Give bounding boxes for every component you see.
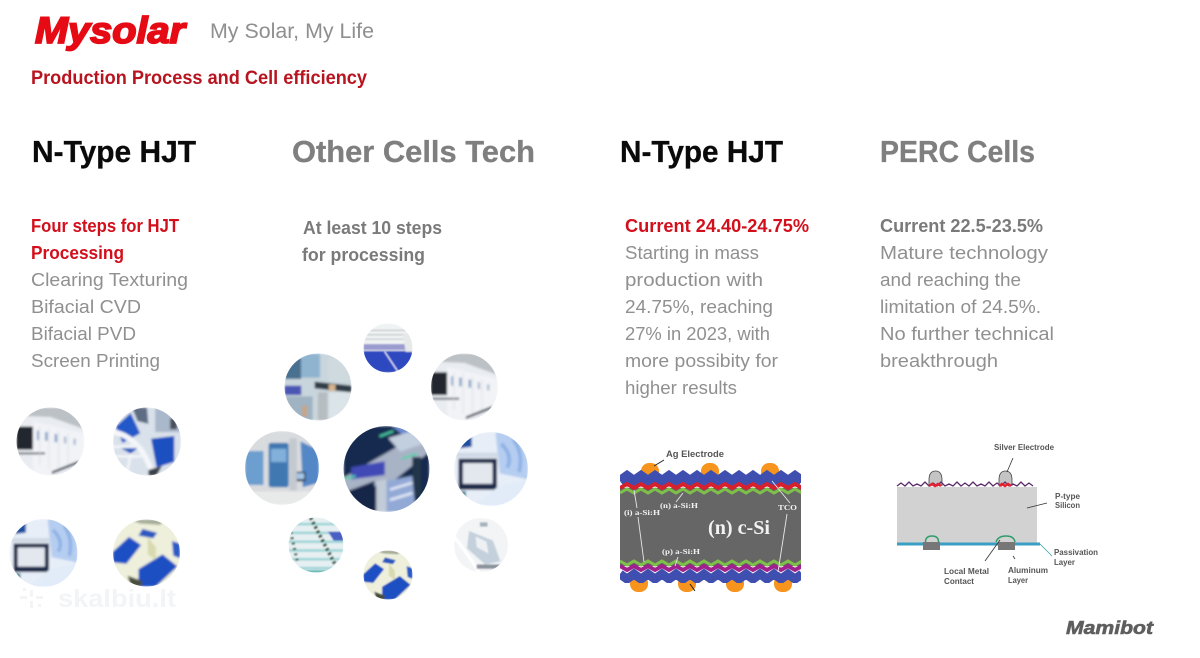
text block: HJT efficiency: production with xyxy=(625,270,763,290)
column heading: PERC Cells: PERC Cells xyxy=(880,134,1035,169)
label: Aluminum Layer xyxy=(1008,566,1048,585)
photo cluster: ten-step process xyxy=(245,324,528,600)
text block: HJT process steps: Screen Printing xyxy=(31,351,160,371)
text block: HJT efficiency xyxy=(625,216,809,398)
label: i a-Si:H: (i) a-Si:H xyxy=(624,509,661,517)
label: Ag Electrode: Ag Electrode xyxy=(666,449,724,459)
watermark: skalbiu.lt xyxy=(58,585,177,613)
column heading: N-Type HJT efficiency: N-Type HJT xyxy=(620,134,783,169)
text block: other cells steps: for processing xyxy=(302,245,425,265)
text block: HJT process steps: Bifacial CVD xyxy=(31,297,141,317)
photo: left xyxy=(245,431,319,505)
photo: centre xyxy=(344,426,430,512)
diagram: PERC cell cross-section xyxy=(897,443,1098,586)
silver electrodes xyxy=(929,471,1012,486)
column heading: N-Type HJT: N-Type HJT xyxy=(32,134,196,169)
column heading: Other Cells Tech: Other Cells Tech xyxy=(292,134,535,169)
label: P-type Silicon: Silicon xyxy=(1055,501,1080,510)
text block: HJT process steps: Clearing Texturing xyxy=(31,270,188,290)
watermark xyxy=(20,585,177,613)
text block: HJT process steps: Four steps for HJT xyxy=(31,216,179,236)
text block: HJT efficiency: 24.75%, reaching xyxy=(625,297,773,317)
text block: HJT process steps xyxy=(31,216,188,371)
text block: PERC efficiency: Current 22.5-23.5% xyxy=(880,216,1043,236)
logo: Mysolar: Mysolar xyxy=(35,10,188,51)
text block: other cells steps xyxy=(302,218,442,265)
text block: HJT efficiency: Current 24.40-24.75% xyxy=(625,216,809,236)
photo: bottom left xyxy=(288,518,344,572)
label: Local Metal Contact: Local Metal xyxy=(944,567,989,576)
photo: screen printing cells xyxy=(113,520,180,586)
photo group: four HJT process photos xyxy=(10,408,181,587)
label: Local Metal Contact: Contact xyxy=(944,577,974,586)
text block: HJT process steps: Bifacial PVD xyxy=(31,324,136,344)
text block: HJT efficiency: more possibity for xyxy=(625,351,778,371)
label: TCO: TCO xyxy=(778,504,798,512)
label: n a-Si:H: (n) a-Si:H xyxy=(660,502,699,510)
label: Local Metal Contact xyxy=(944,567,989,586)
photo: bottom xyxy=(364,550,412,600)
tagline: My Solar, My Life xyxy=(210,20,374,43)
label: Passivation Layer: Passivation xyxy=(1054,548,1098,557)
label: Aluminum Layer: Layer xyxy=(1008,576,1028,585)
label: Aluminum Layer: Aluminum xyxy=(1008,566,1048,575)
Ag electrodes xyxy=(630,463,792,592)
label: Passivation Layer: Layer xyxy=(1054,558,1075,567)
photo: cleaning machine xyxy=(16,408,84,476)
photo: bottom right xyxy=(454,518,508,572)
text block: PERC efficiency: No further technical xyxy=(880,324,1054,344)
text block: PERC efficiency: limitation of 24.5%. xyxy=(880,297,1041,317)
photo: CVD wheel xyxy=(113,408,181,476)
text block: HJT efficiency: Starting in mass xyxy=(625,243,759,263)
text block: HJT efficiency: 27% in 2023, with xyxy=(625,324,770,344)
photo: top right xyxy=(431,354,498,420)
photo: top xyxy=(364,324,412,372)
text block: PERC efficiency: breakthrough xyxy=(880,351,998,371)
label: n c-Si: (n) c-Si xyxy=(708,517,770,539)
label: P-type Silicon xyxy=(1055,492,1081,510)
text block: other cells steps: At least 10 steps xyxy=(303,218,442,238)
label: Silver Electrode: Silver Electrode xyxy=(994,443,1055,452)
photo: top left xyxy=(284,354,352,420)
text block: PERC efficiency: Mature technology xyxy=(880,243,1048,263)
text block: HJT process steps: Processing xyxy=(31,243,124,263)
subtitle: Production Process and Cell efficiency xyxy=(31,68,367,89)
logo: Mamibot: Mamibot xyxy=(1066,618,1154,638)
text block: HJT efficiency: higher results xyxy=(625,378,737,398)
text block: PERC efficiency: and reaching the xyxy=(880,270,1021,290)
photo: right xyxy=(454,432,528,506)
label: Passivation Layer xyxy=(1054,548,1098,567)
text block: PERC efficiency xyxy=(880,216,1054,371)
label: p a-Si:H: (p) a-Si:H xyxy=(662,548,701,556)
photo: PVD monitor xyxy=(10,519,78,587)
diagram: HJT cell cross-section xyxy=(620,449,802,592)
label: P-type Silicon: P-type xyxy=(1055,492,1081,501)
